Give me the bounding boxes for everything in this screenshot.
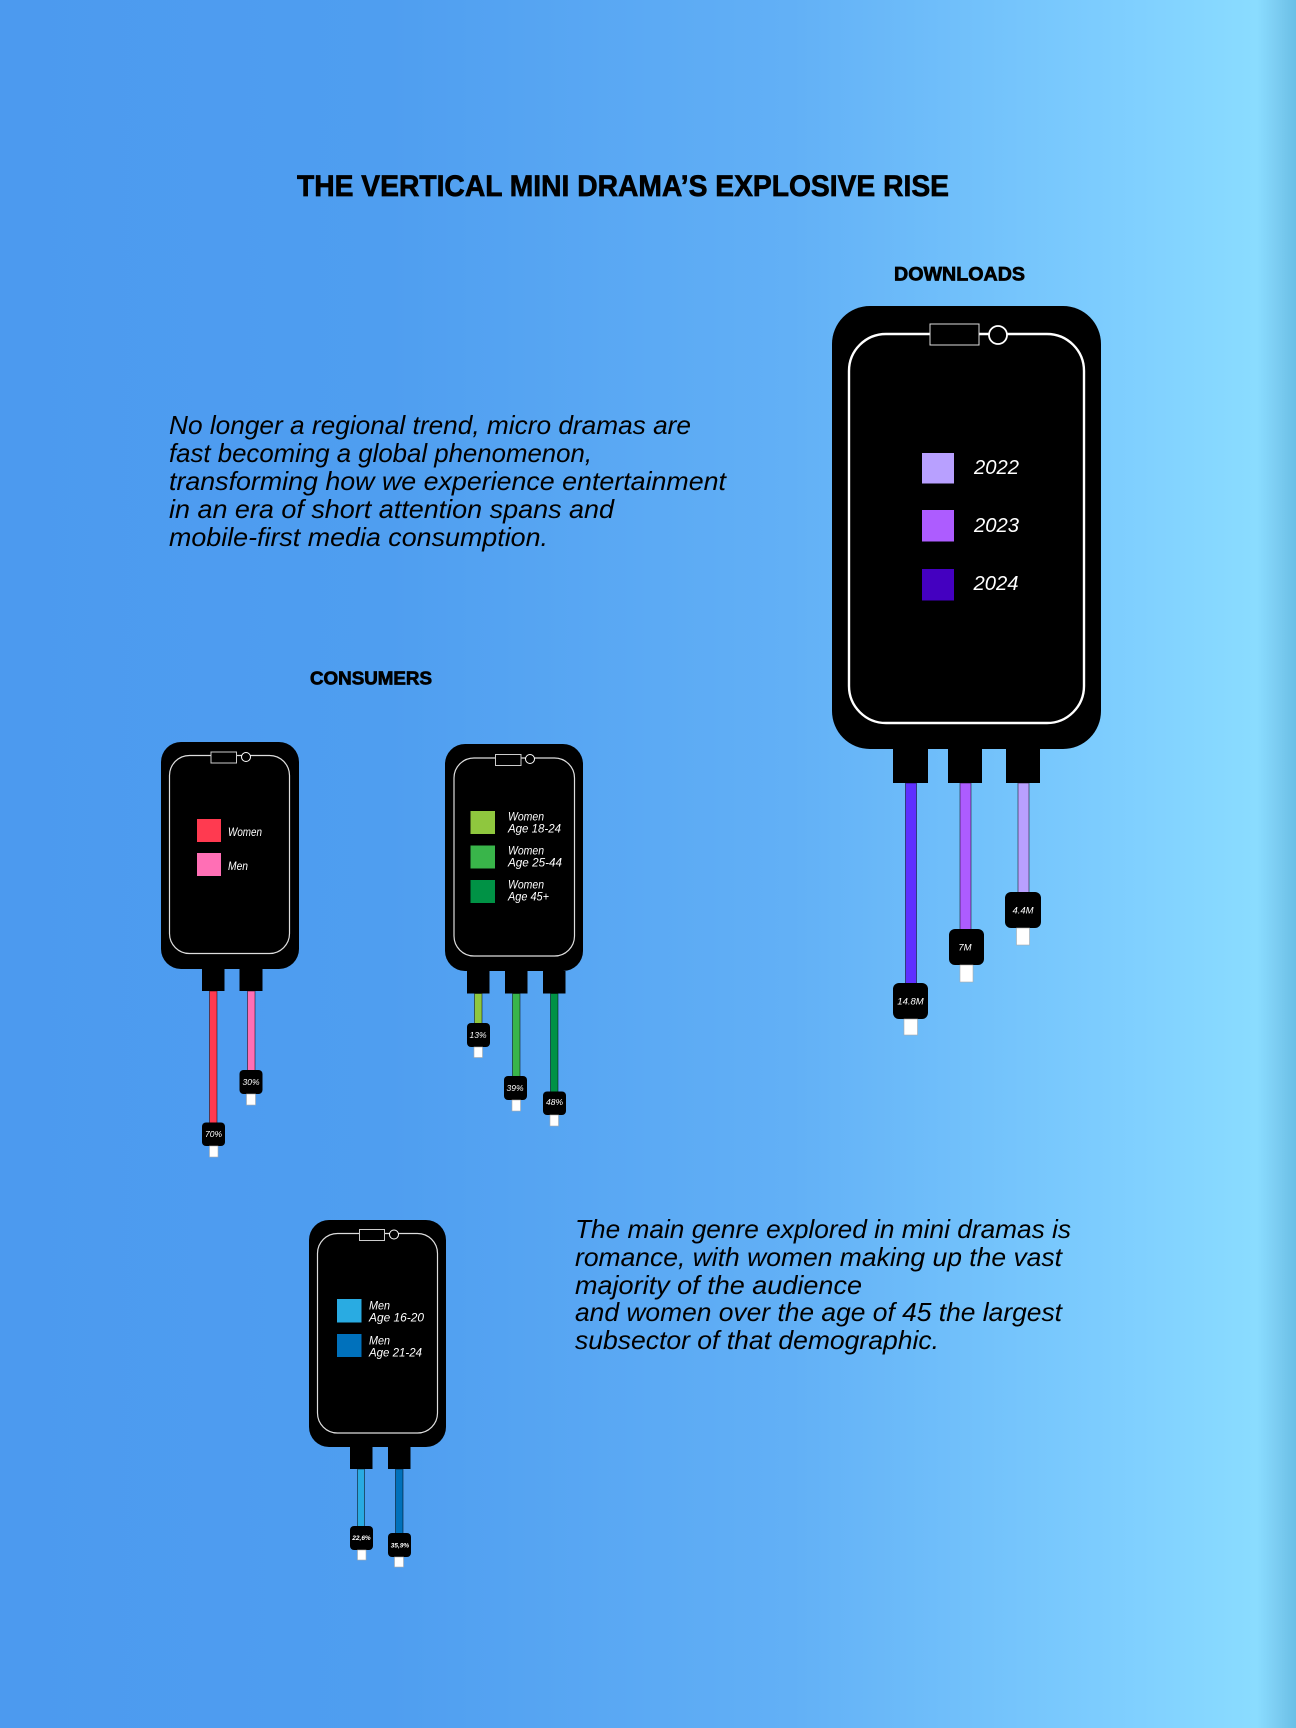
phone body — [832, 306, 1101, 749]
legend: men — [197, 853, 248, 876]
phone screen outline — [454, 758, 574, 956]
cable: age 45+ 48% — [543, 971, 566, 1126]
cable: age 25-44 39%: 39% — [506, 1083, 524, 1093]
legend: men: Men — [228, 859, 248, 873]
cable: men 16-20 22.6%: 22,6% — [351, 1535, 371, 1542]
legend: women age 45+: Women — [508, 878, 544, 892]
cable: age 45+ 48%: 48% — [546, 1097, 563, 1107]
intro paragraph: in an era of short attention spans and — [169, 494, 616, 524]
phone notch — [496, 754, 534, 766]
intro paragraph — [169, 410, 728, 552]
intro paragraph: mobile-first media consumption. — [169, 522, 548, 552]
legend: women age 18-24: Women — [508, 810, 544, 824]
genre paragraph: The main genre explored in mini dramas is — [575, 1214, 1071, 1244]
legend: women age 25-44 — [470, 844, 562, 870]
phone notch — [211, 752, 250, 763]
phone body — [309, 1220, 446, 1447]
panel: downloads phone chart — [832, 306, 1101, 1035]
phone screen outline — [849, 334, 1084, 723]
legend: 2024 — [922, 569, 1018, 600]
panel: consumers by gender phone chart — [161, 742, 299, 1157]
cable: women 70%: 70% — [205, 1129, 222, 1139]
genre paragraph — [575, 1214, 1071, 1355]
legend: men age 21-24: Men — [369, 1334, 390, 1348]
phone screen outline — [170, 756, 290, 954]
cable: age 18-24 13%: 13% — [469, 1030, 487, 1040]
title: THE VERTICAL MINI DRAMA’S EXPLOSIVE RISE — [297, 170, 949, 203]
legend: women: Women — [228, 825, 262, 839]
legend: women age 18-24 — [470, 810, 561, 836]
panel: men by age phone chart — [309, 1220, 446, 1567]
genre paragraph: majority of the audience — [575, 1270, 862, 1300]
cable: women 70% — [202, 969, 225, 1157]
legend: women age 45+: Age 45+ — [507, 890, 549, 904]
cable: 2024 14.8M: 14.8M — [897, 996, 924, 1008]
legend: men age 16-20: Age 16-20 — [368, 1310, 424, 1324]
cable: 2024 14.8M — [893, 749, 928, 1035]
cable: 2023 7M — [948, 749, 984, 982]
legend: 2024: 2024 — [972, 573, 1018, 595]
intro paragraph: transforming how we experience entertainment — [169, 466, 728, 496]
cable: age 18-24 13% — [467, 971, 490, 1058]
legend: women age 18-24: Age 18-24 — [507, 822, 561, 836]
legend: women age 25-44: Women — [508, 844, 544, 858]
legend: women age 25-44: Age 25-44 — [507, 856, 562, 870]
cable: men 30%: 30% — [242, 1077, 260, 1087]
cable: men 16-20 22.6% — [350, 1447, 373, 1560]
cable: men 21-24 35.9%: 35,9% — [391, 1542, 409, 1550]
intro paragraph: No longer a regional trend, micro dramas are — [169, 410, 691, 440]
cable: 2023 7M: 7M — [958, 942, 972, 954]
genre paragraph: subsector of that demographic. — [575, 1325, 939, 1355]
heading: consumers: CONSUMERS — [310, 668, 432, 688]
cable: men 30% — [240, 969, 262, 1105]
legend: 2022: 2022 — [973, 457, 1019, 479]
intro paragraph: fast becoming a global phenomenon, — [169, 438, 592, 468]
legend: men age 21-24: Age 21-24 — [368, 1346, 422, 1360]
panel: women by age phone chart — [445, 744, 583, 1126]
phone screen outline — [318, 1234, 438, 1433]
legend: women age 45+ — [470, 878, 549, 904]
phone body — [161, 742, 299, 969]
legend: 2023: 2023 — [973, 515, 1019, 537]
legend: men age 16-20: Men — [369, 1298, 390, 1312]
legend: men age 16-20 — [337, 1298, 424, 1324]
phone notch — [930, 324, 1007, 345]
cable: 2022 4.4M: 4.4M — [1012, 906, 1034, 916]
cable: 2022 4.4M — [1005, 749, 1041, 945]
phone notch — [360, 1230, 398, 1240]
legend: 2023 — [922, 510, 1019, 542]
genre paragraph: and women over the age of 45 the largest — [575, 1297, 1064, 1327]
phone body — [445, 744, 583, 971]
cable: men 21-24 35.9% — [388, 1447, 411, 1567]
legend: 2022 — [922, 453, 1019, 484]
genre paragraph: romance, with women making up the vast — [575, 1242, 1064, 1272]
cable: age 25-44 39% — [504, 971, 528, 1111]
legend: men age 21-24 — [337, 1334, 422, 1360]
heading: downloads: DOWNLOADS — [894, 264, 1025, 286]
legend: women — [197, 819, 262, 842]
